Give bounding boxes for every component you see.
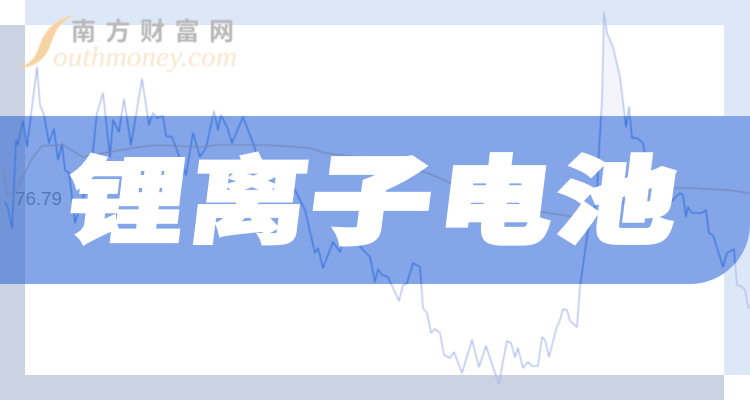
- logo latin name: outhmoney.com: [53, 42, 237, 73]
- logo chinese name: 南方财富网: [71, 17, 234, 46]
- logo swoosh: [17, 15, 76, 68]
- title: 锂离子电池: 电: [433, 150, 558, 256]
- spike area fill: [602, 12, 626, 127]
- title: 锂离子电池: 子: [306, 149, 438, 255]
- moving average line: [3, 145, 750, 218]
- logo: southmoney: [17, 15, 237, 73]
- title: 锂离子电池: 离: [183, 149, 315, 255]
- title: 锂离子电池: 锂: [61, 149, 193, 255]
- blue banner: [0, 116, 750, 284]
- title: 锂离子电池: [61, 149, 683, 256]
- title: 锂离子电池: 池: [551, 149, 683, 255]
- axis value label: 76.79: [15, 189, 62, 209]
